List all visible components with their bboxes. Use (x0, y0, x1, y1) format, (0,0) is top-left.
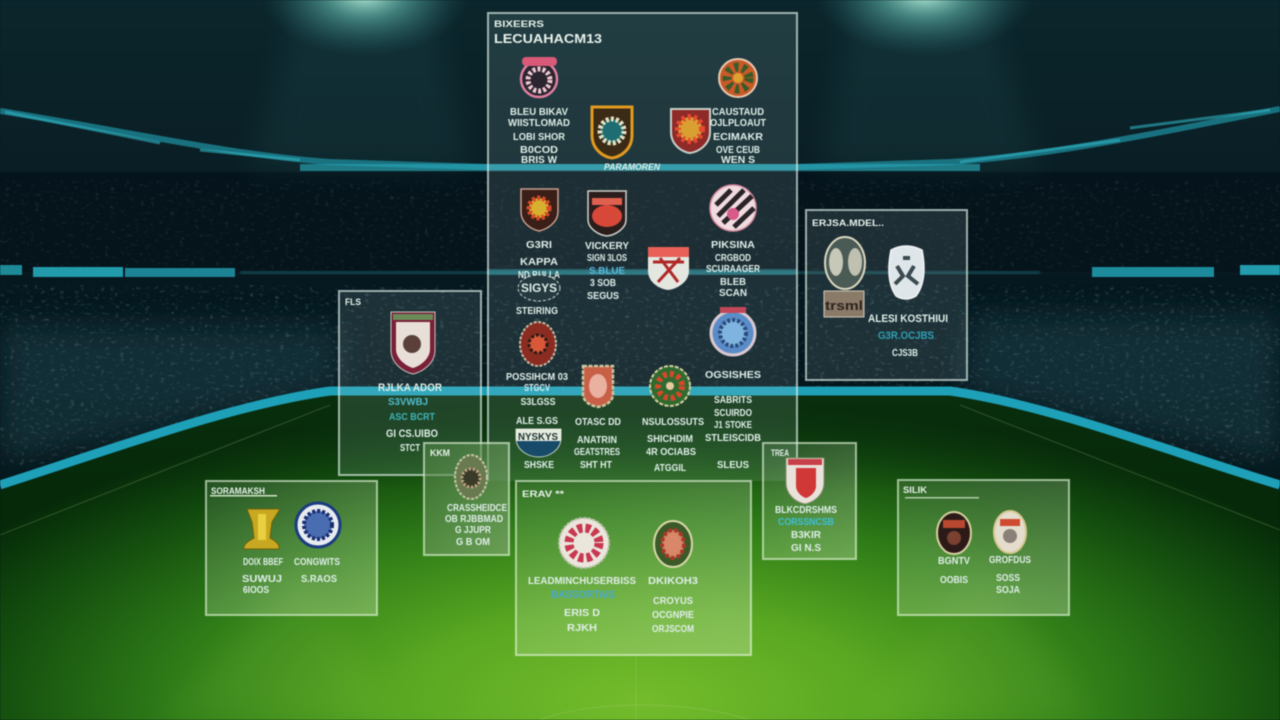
small right text: GI N.S (791, 543, 821, 554)
teal beam across panels (300, 164, 980, 275)
crest 7 text: SCAN (719, 288, 747, 299)
top right text: CJS3B (892, 348, 918, 359)
main panel heading (494, 19, 602, 46)
dark tan plate: trsml (825, 298, 863, 313)
crest 13 text: SHSKE (524, 460, 554, 471)
bottom left card heading: SORAMAKSH (211, 486, 265, 497)
small right heading: TREA (771, 448, 789, 459)
small card text: CRASSHEIDCE (447, 503, 507, 514)
white red crest text: ERIS D (564, 608, 600, 619)
gold crest text: DOIX BBEF (243, 557, 283, 568)
crest 9 text (506, 372, 568, 427)
white crest text (989, 555, 1031, 596)
crest 12 text: ATGGIL (654, 463, 686, 474)
crest 9 text: S3LGSS (520, 397, 556, 408)
panel: left club card (339, 291, 481, 475)
small right text (775, 505, 837, 554)
crest 5 text: ND BULLA (518, 270, 560, 281)
crest 10 text: OGSISHES (705, 370, 761, 381)
green red crest (654, 521, 692, 567)
dark tan plate (824, 291, 864, 317)
crest 6 text (585, 241, 629, 302)
crest 1 text: BLEU BIKAV (510, 107, 568, 118)
white crest text: SOSS (996, 573, 1020, 584)
panel: bottom left card (206, 481, 377, 615)
small card heading: KKM (430, 448, 450, 459)
left card text: ASC BCRT (389, 412, 435, 423)
blue crest text (294, 557, 340, 585)
crest 1 text (508, 107, 570, 166)
main panel heading: BIXEERS (494, 19, 544, 30)
white shield crest (889, 246, 924, 299)
gold crest text: SUWUJ (242, 574, 282, 585)
crest 6 text: SEGUS (587, 291, 619, 302)
crest 12 (650, 366, 690, 406)
crest 12 text: 4R OCIABS (646, 447, 696, 458)
crest 12 text: SHICHDIM (647, 434, 693, 445)
small card crest (455, 455, 487, 499)
blue round crest (296, 503, 340, 547)
crest 3 red yellow (671, 109, 710, 153)
bottom right heading: SILIK (903, 485, 927, 496)
blue crest text: S.RAOS (301, 574, 337, 585)
white crest text: GROFDUS (989, 555, 1031, 566)
small card text (445, 503, 507, 548)
crest 10 text: SABRITS (714, 395, 752, 406)
crest 7 striped (710, 185, 756, 231)
green red crest text: ORJSCOM (652, 624, 694, 635)
crest 11 (583, 366, 613, 407)
bottom right heading (903, 485, 979, 498)
crest 5 text: G3RI (526, 240, 552, 251)
white red crest text: LEADMINCHUSERBISS (528, 576, 636, 587)
left card text: S3VWBJ (388, 397, 428, 408)
crest 10 text: J1 STOKE (714, 420, 752, 431)
main panel sublabel: PARAMOREN (604, 162, 660, 172)
teal pitch boundary ribbon (0, 391, 1280, 485)
gold crest text (242, 557, 283, 596)
green red crest text: OCGNPIE (652, 610, 694, 621)
crest 4 text: OJLPLOAUT (710, 118, 766, 129)
dark oval crest (825, 237, 865, 289)
crest 10 text (705, 370, 761, 471)
left card text: RJLKA ADOR (378, 382, 442, 394)
green pitch (0, 394, 1280, 720)
crest 10 text: SLEUS (717, 460, 749, 471)
crest 11 text: SHT HT (580, 460, 612, 471)
crest 12 text (642, 417, 704, 474)
left card heading: FLS (345, 297, 361, 308)
white red crest text (528, 576, 636, 634)
crest 11 text: GEATSTRES (574, 447, 620, 458)
white crest (994, 511, 1026, 553)
crest 9 text: ALE S.GS (516, 416, 558, 427)
crest 13: NYSKYS (518, 432, 558, 443)
crest 6 (588, 191, 626, 236)
crest 9 text: POSSIHCM 03 (506, 372, 568, 383)
crest 6 text: VICKERY (585, 241, 629, 252)
green red crest text: CROYUS (653, 596, 693, 607)
crest 1 text: WIISTLOMAD (508, 118, 570, 129)
small card text: OB RJBBMAD (445, 514, 503, 525)
small right text: BLKCDRSHMS (775, 505, 837, 516)
panel: main league table (488, 13, 797, 481)
panel: bottom centre card (516, 481, 751, 655)
crest 5 text: STEIRING (516, 306, 558, 317)
crest 9 (520, 322, 556, 366)
crest 5 text (516, 240, 560, 317)
crest 6 text: SIGN 3LOS (587, 253, 627, 264)
main panel heading: LECUAHACM13 (494, 31, 602, 46)
dark crest (937, 512, 971, 554)
dark crest text: BGNTV (938, 556, 970, 567)
crest 10 text: STLEISCIDB (705, 433, 761, 444)
bottom centre heading: ERAV ** (522, 489, 564, 500)
crest 6 text: 3 SOB (590, 278, 616, 289)
crest 11 text (574, 417, 621, 471)
left card text: STCT (400, 443, 420, 454)
crest 7 text: CRGBOD (715, 253, 751, 264)
crest 11 text: ANATRIN (577, 435, 617, 446)
dark crest text (938, 556, 970, 586)
gold trophy crest (244, 509, 280, 549)
panel: small card lower right (763, 443, 856, 559)
crest 10 text: SCUIRDO (714, 408, 752, 419)
small right text: CORSSNCSB (778, 517, 834, 528)
crest 1 pink (521, 57, 557, 97)
left card text: GI CS.UIBO (386, 428, 438, 440)
crest 12 text: NSULOSSUTS (642, 417, 704, 428)
crest 5 text: KAPPA (520, 257, 558, 268)
green red crest text (648, 576, 698, 635)
top right text: G3R.OCJBS (878, 330, 934, 342)
crest 4 text: CAUSTAUD (712, 107, 764, 118)
white red crest (559, 518, 609, 568)
stadium background (0, 0, 1280, 465)
crest 4 text: OVE CEUB (716, 145, 760, 156)
crest 9 text: STGCV (524, 383, 550, 394)
panel: top right card (806, 210, 967, 380)
crest 5 (521, 189, 558, 231)
white red crest text: BASSORTAIS (551, 589, 615, 601)
upper teal stadium ribbons (0, 109, 1280, 277)
crest 7 text (706, 240, 761, 299)
left card shield crest (391, 312, 435, 374)
crest 4 orange mosaic (719, 59, 757, 97)
crest 11 text: OTASC DD (575, 417, 621, 428)
crest 4 text: WEN S (721, 155, 755, 166)
panel: small card lower left (424, 443, 509, 555)
crest 5 text: SIGYS (521, 281, 557, 295)
top right text: ALESI KOSTHIUI (868, 313, 948, 325)
small card text: G JJUPR (455, 525, 492, 536)
green red crest text: DKIKOH3 (648, 576, 698, 587)
crest 7 text: PIKSINA (711, 240, 755, 251)
dark crest text: OOBIS (940, 575, 968, 586)
white red crest text: RJKH (567, 623, 597, 634)
left card text (378, 382, 442, 454)
crest 4 text: ECIMAKR (713, 132, 764, 143)
small right text: B3KIR (791, 530, 822, 541)
crest 13 (516, 429, 561, 457)
blue crest text: CONGWITS (294, 557, 340, 568)
crest 7 text: BLEB (720, 277, 746, 288)
crest 6 text: S.BLUE (589, 266, 625, 277)
crest 7 text: SCURAAGER (706, 264, 761, 275)
crest 1 text: B0COD (520, 145, 558, 156)
crest 2 orange (592, 107, 632, 158)
panel: bottom right card (898, 480, 1069, 615)
small card text: G B OM (456, 537, 490, 548)
top right heading: ERJSA.MDEL.. (812, 218, 884, 229)
small right crest (786, 458, 824, 504)
crest 1 text: BRIS W (521, 155, 558, 166)
crest 4 text (710, 107, 766, 166)
crest 10 blue (711, 307, 755, 355)
crest 8 flag (648, 247, 689, 290)
top right text (868, 313, 948, 359)
white crest text: SOJA (996, 585, 1020, 596)
crest 1 text: LOBI SHOR (513, 132, 566, 143)
gold crest text: 6IOOS (243, 585, 269, 596)
